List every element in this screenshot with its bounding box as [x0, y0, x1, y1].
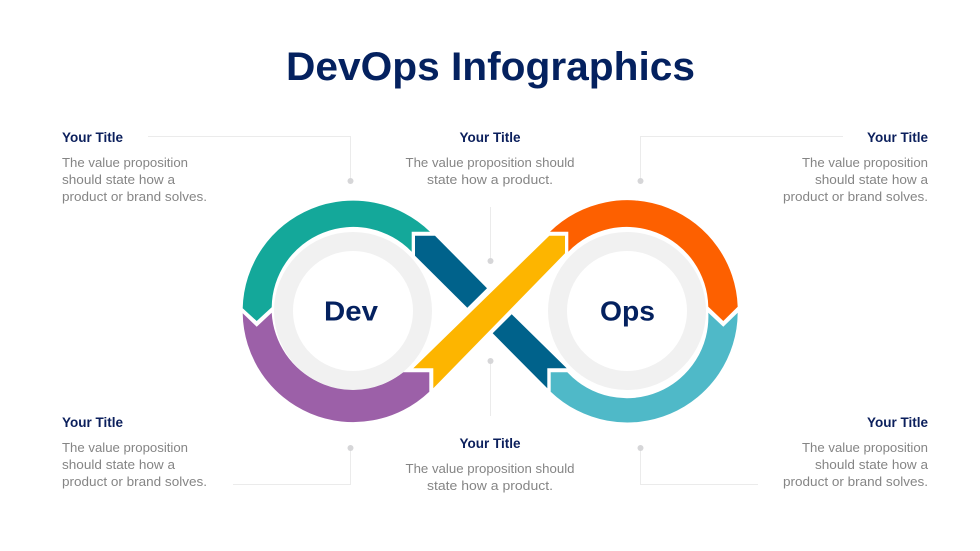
text block: top-left: should state how a — [62, 172, 176, 187]
text block: bottom-center: state how a product. — [427, 478, 553, 493]
heading: bottom-center: Your Title — [460, 435, 521, 451]
text block: bottom-left: product or brand solves. — [62, 474, 207, 489]
text block: top-left: product or brand solves. — [62, 189, 207, 204]
text block: top-right — [783, 155, 929, 204]
text block: bottom-center: The value proposition should — [406, 461, 574, 476]
heading: top-right: Your Title — [867, 129, 928, 145]
label: ops: Ops — [600, 296, 655, 326]
text block: bottom-left — [62, 440, 207, 489]
text block: top-left: The value proposition — [62, 155, 188, 170]
arrow: dark blue left — [415, 236, 487, 308]
segment: light blue — [551, 313, 738, 422]
connector: top-left — [148, 136, 354, 184]
panel: bottom-center text — [406, 435, 574, 493]
ring: ops — [558, 242, 696, 380]
panel: top-left text — [62, 129, 207, 204]
segment: purple — [243, 313, 429, 422]
text block: top-center — [406, 155, 574, 187]
text block: top-center: state how a product. — [427, 172, 553, 187]
panel: top-center text — [406, 129, 574, 187]
text block: top-right: The value proposition — [802, 155, 928, 170]
text block: bottom-right: product or brand solves. — [783, 474, 928, 489]
text block: bottom-left: should state how a — [62, 457, 176, 472]
text block: top-left — [62, 155, 207, 204]
panel: bottom-right text — [783, 414, 929, 489]
text block: top-right: should state how a — [815, 172, 929, 187]
text block: bottom-center — [406, 461, 574, 493]
arrow: yellow — [413, 236, 565, 388]
text block: top-right: product or brand solves. — [783, 189, 928, 204]
heading: top-left: Your Title — [62, 129, 123, 145]
connector: bottom-left — [233, 445, 354, 484]
ring: dev — [284, 242, 422, 380]
panel: top-right text — [783, 129, 929, 204]
infinity diagram — [243, 200, 738, 422]
connector: bottom-right — [638, 445, 758, 484]
connector: top-right — [638, 136, 843, 184]
connector: top-center — [488, 207, 494, 264]
connector: bottom-center — [488, 358, 494, 416]
title: DevOps Infographics — [286, 45, 695, 89]
segment: teal — [243, 201, 430, 321]
segment: orange — [550, 200, 738, 321]
label: dev: Dev — [324, 296, 378, 326]
text block: bottom-right — [783, 440, 929, 489]
heading: top-center: Your Title — [460, 129, 521, 145]
text block: bottom-right: should state how a — [815, 457, 929, 472]
text block: top-center: The value proposition should — [406, 155, 574, 170]
heading: bottom-right: Your Title — [867, 414, 928, 430]
text block: bottom-left: The value proposition — [62, 440, 188, 455]
panel: bottom-left text — [62, 414, 207, 489]
heading: bottom-left: Your Title — [62, 414, 123, 430]
text block: bottom-right: The value proposition — [802, 440, 928, 455]
arrow: dark blue right — [493, 314, 567, 388]
